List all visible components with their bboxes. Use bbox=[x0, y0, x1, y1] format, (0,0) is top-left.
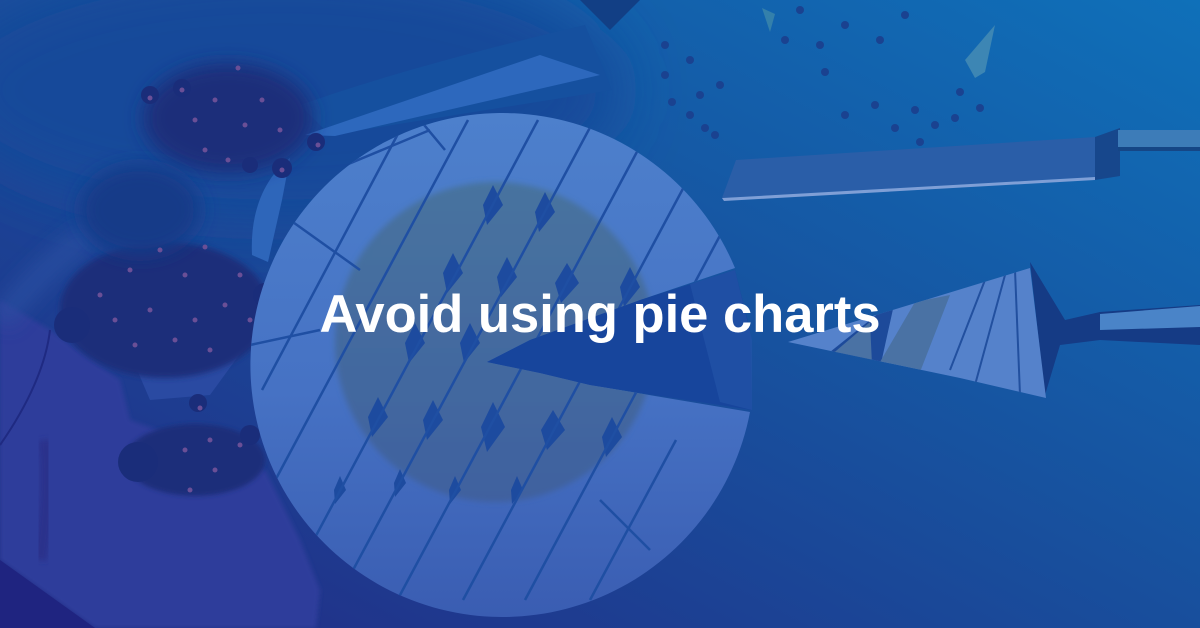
missing wedge shadow bbox=[487, 270, 752, 410]
berry clusters, left bbox=[54, 63, 325, 496]
cloth: lower left napkin bbox=[0, 235, 320, 628]
cake slice bbox=[788, 268, 1046, 398]
berry cluster: top right bbox=[580, 0, 995, 146]
pie server handle bbox=[1030, 262, 1200, 395]
title: Avoid using pie charts bbox=[319, 285, 881, 344]
napkin fold, upper centre bbox=[252, 25, 612, 262]
lattice filling bbox=[335, 182, 655, 502]
crust cuts bbox=[250, 120, 739, 610]
cake knife blade bbox=[722, 128, 1200, 201]
lattice holes bbox=[334, 185, 640, 504]
whole pie with missing wedge bbox=[250, 113, 750, 617]
